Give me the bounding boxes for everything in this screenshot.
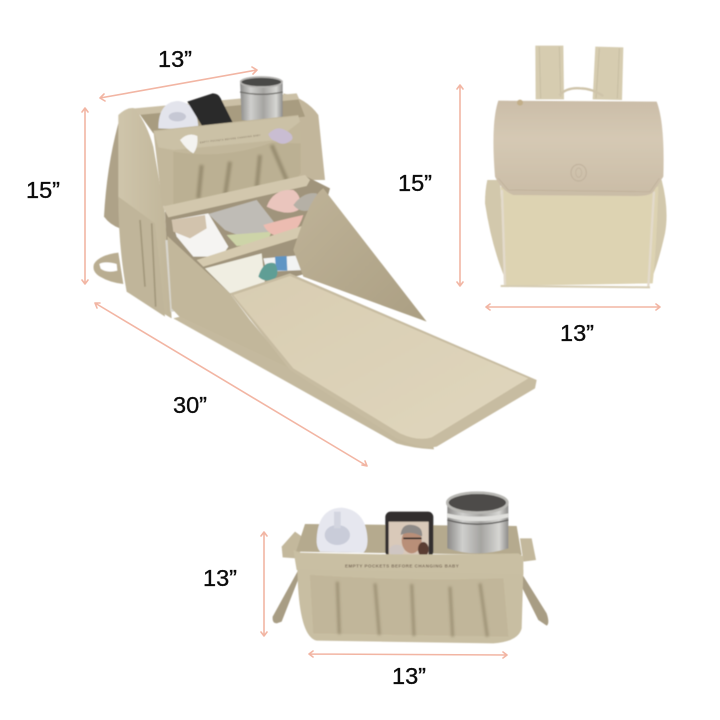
side pockets [485,180,505,278]
bottle [317,508,367,553]
steel cup [447,493,508,553]
pockets body [297,567,523,643]
arrow: organiser height [261,532,267,636]
right door panel [293,188,427,322]
arrow: top depth [100,67,257,101]
back panel right side [283,93,325,180]
arrow: front width [486,304,660,310]
flap [493,100,664,196]
steel cup [240,77,283,121]
organiser pockets: EMPTY POCKETS BEFORE CHANGING BABY [200,134,261,144]
label: open length: 30” [173,392,207,418]
straps [273,532,548,626]
fork [180,135,197,153]
middle shelf [197,223,313,267]
arrow: organiser width [309,651,507,658]
arrow: left height [82,108,88,284]
rim [293,550,523,575]
left door panel [167,236,293,372]
arrow: front height [457,85,463,286]
changing mat [230,273,537,447]
bag: stroller organiser [273,493,548,643]
shoulder straps [535,46,623,100]
pacifier [268,128,292,144]
top handle [559,88,603,96]
bag: open backpack with changing mat [93,77,537,449]
side panel [118,108,172,318]
back straps and rear flap [93,123,127,284]
organiser pockets [153,115,302,210]
label: organiser height: 13” [203,565,237,591]
side pocket [118,197,165,317]
front body [501,187,658,286]
shelf rim under organiser [163,175,310,217]
phone [385,512,433,557]
interior shelf cavity [165,177,330,307]
interior [296,524,522,555]
outer base strip [173,317,434,449]
label: front width: 13” [560,320,594,346]
label: organiser width: 13” [392,663,426,689]
phone [187,93,234,131]
piping [502,190,654,287]
printed slogan: EMPTY POCKETS BEFORE CHANGING BABY [345,564,459,569]
label: front height: 15” [398,170,432,196]
arrow: open length [95,303,367,466]
label: top depth: 13” [158,46,192,72]
bottle [158,101,198,133]
clothing items upper shelf [172,190,318,257]
organiser top opening [137,95,305,133]
diapers and tube lower shelf [205,253,305,293]
label: left height: 15” [26,177,60,203]
bag: front view of backpack [485,46,667,287]
zipper edge [167,240,172,312]
